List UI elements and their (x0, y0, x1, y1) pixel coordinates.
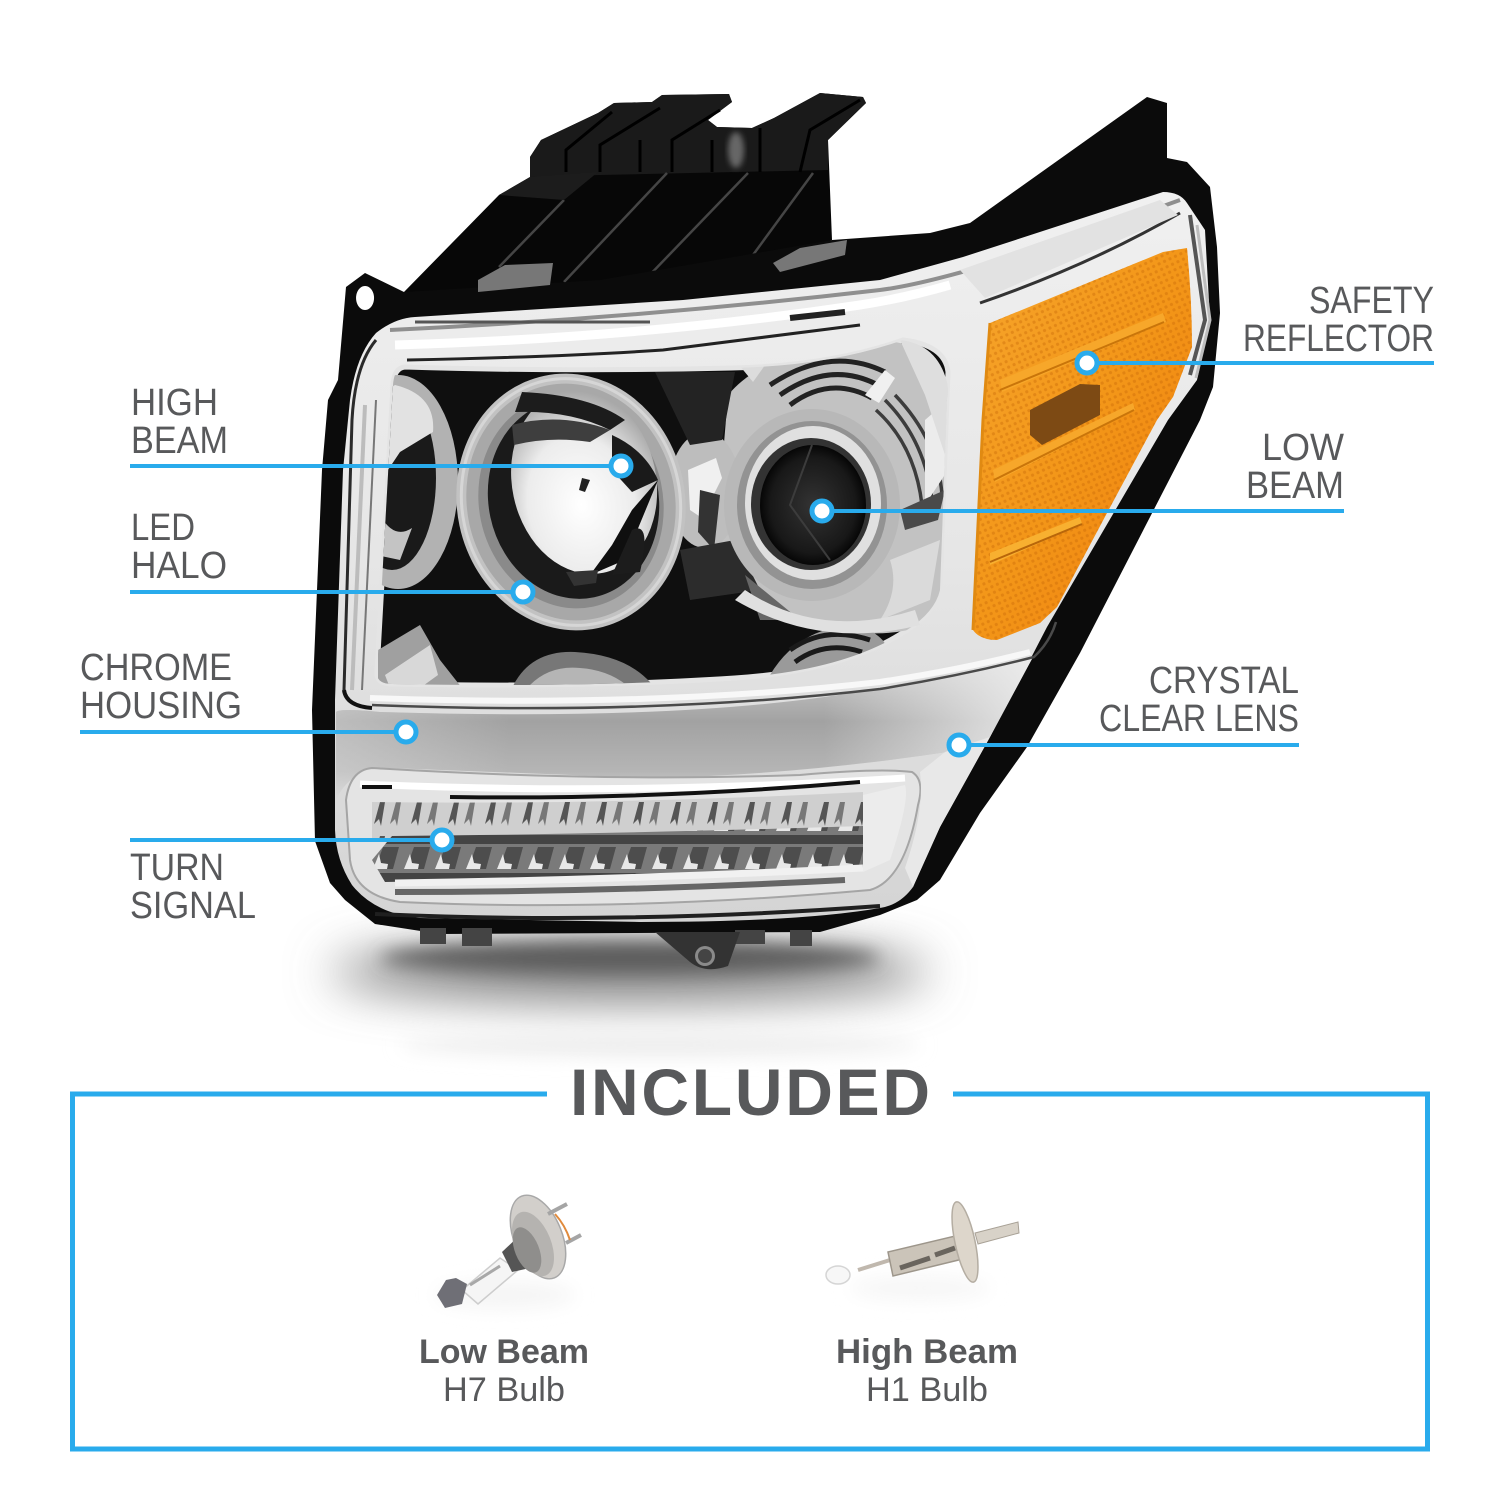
icon: H7 bulb (435, 1187, 581, 1309)
black outer housing (312, 97, 1220, 934)
low beam label (419, 1333, 589, 1409)
amber side reflector (973, 248, 1192, 640)
floor shadow (330, 942, 930, 1057)
chrome housing band (336, 622, 1056, 800)
callout: crystal clear lens: CRYSTAL (1149, 660, 1299, 702)
high beam label: High Beam (836, 1333, 1018, 1371)
included box outline (72, 1094, 1428, 1449)
projector chrome shroud (716, 340, 950, 633)
headlight product image (312, 93, 1220, 1057)
turn signal assembly (346, 768, 920, 918)
icon: H1 bulb (826, 1200, 1019, 1300)
callout: low beam: LOW (1262, 427, 1344, 469)
panel: included (72, 1055, 1428, 1449)
bottom mount tabs (420, 928, 812, 969)
callout: low beam (812, 427, 1344, 521)
callout: chrome housing: HOUSING (80, 685, 242, 727)
callout: low beam: BEAM (1246, 465, 1344, 507)
callout: chrome housing: CHROME (80, 647, 232, 689)
callout: turn signal: SIGNAL (130, 885, 256, 927)
callout: safety reflector: SAFETY (1309, 280, 1434, 322)
middle gap reflector (655, 372, 760, 600)
top black mounting bracket (404, 93, 866, 300)
low beam label: Low Beam (419, 1333, 589, 1371)
crystal lens right corner (905, 737, 990, 887)
high beam label (836, 1333, 1018, 1409)
high beam label: H1 Bulb (866, 1371, 988, 1409)
left partial reflector (382, 375, 458, 589)
LED rows (372, 785, 906, 892)
callout: LED halo: HALO (131, 545, 227, 587)
callout: high beam: BEAM (131, 420, 228, 462)
clear lens body (335, 192, 1210, 922)
callout: chrome housing (80, 647, 416, 742)
callout: turn signal (130, 830, 452, 927)
plastic clips (478, 240, 847, 292)
callout: crystal clear lens (949, 660, 1299, 755)
bottom lamp shapes (378, 575, 886, 688)
low beam label: H7 Bulb (443, 1371, 565, 1409)
callout: safety reflector (1077, 280, 1434, 373)
callout: safety reflector: REFLECTOR (1243, 318, 1434, 360)
callout: turn signal: TURN (130, 847, 224, 889)
low beam projector and halo (724, 409, 920, 633)
top chrome trim (344, 200, 1210, 708)
callout: high beam (130, 382, 631, 476)
callout: LED halo: LED (131, 507, 195, 549)
high beam reflector and halo (433, 352, 709, 652)
callout: crystal clear lens: CLEAR LENS (1099, 698, 1299, 740)
high beam reflections (439, 358, 703, 646)
included heading: INCLUDED (570, 1055, 930, 1129)
lamp window (338, 340, 950, 688)
callout: high beam: HIGH (131, 382, 218, 424)
callout: LED halo (130, 507, 533, 602)
